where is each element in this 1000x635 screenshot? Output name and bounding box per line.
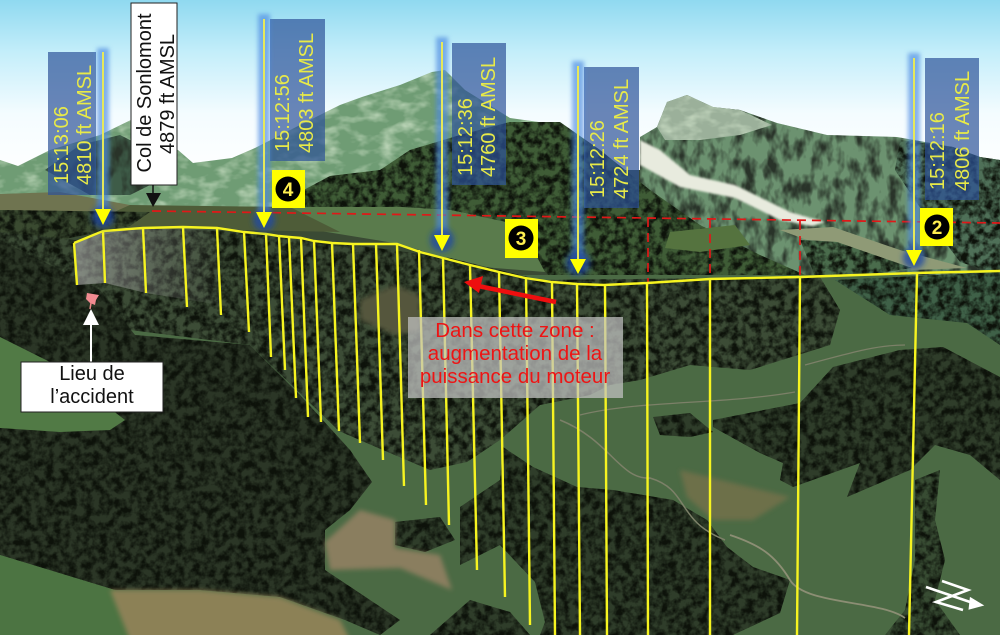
meadow: clearing in central hill <box>665 225 750 252</box>
callout: engine power increase: augmentation de la <box>428 342 603 365</box>
meadow: lower base <box>0 275 1000 635</box>
time label 15:13:06: 15:13:06 <box>51 106 73 184</box>
time label 15:12:16: 15:12:16 <box>927 112 949 190</box>
time label 15:12:56 <box>253 14 325 231</box>
forest: teal top right <box>835 272 1000 345</box>
red arrow to power increase zone <box>464 276 556 302</box>
sky <box>0 0 1000 175</box>
callout: engine power increase: Dans cette zone : <box>435 319 595 342</box>
track: lower right <box>730 535 905 618</box>
callout: engine power increase <box>408 317 623 398</box>
badge 4: 4 <box>283 180 294 201</box>
forest: bottom gap fill <box>430 600 530 635</box>
mountain: dark right massif <box>895 140 1000 275</box>
time label 15:13:06: 4810 ft AMSL <box>74 65 96 185</box>
field: tan bottom <box>110 590 350 635</box>
time label 15:12:26: 15:12:26 <box>587 120 609 198</box>
forest: right block <box>713 347 1000 497</box>
mountain: rock summit highlights <box>657 95 772 140</box>
forest: small clump right <box>653 413 713 437</box>
time label 15:12:36: 4760 ft AMSL <box>478 57 500 177</box>
time label 15:13:06 <box>48 48 114 228</box>
field: tan clearing <box>325 510 452 590</box>
callout: accident site with white arrow <box>21 309 163 412</box>
meadow: olive ridge left <box>0 192 152 215</box>
red dashed drop lines <box>648 218 800 283</box>
badge 3: 3 <box>516 229 526 250</box>
icon: red pushpin at accident site <box>86 293 99 309</box>
forest: small clump <box>395 517 455 552</box>
mountain: rocky crag and right massif <box>640 95 1000 275</box>
time label 15:12:16: 4806 ft AMSL <box>952 71 974 191</box>
time label 15:12:26: 4724 ft AMSL <box>611 79 633 199</box>
badge 3 <box>505 219 538 258</box>
vertical altitude lines <box>74 227 917 635</box>
terrain foreground <box>0 228 1000 635</box>
time label 15:12:26 <box>566 61 639 275</box>
badge 4 <box>272 170 305 208</box>
forest: ridge to lines slope <box>0 228 840 470</box>
terrain background: mountains <box>0 70 1000 287</box>
callout: engine power increase: puissance du moteur <box>420 365 610 388</box>
time label 15:12:56: 15:12:56 <box>272 74 294 152</box>
meadow: lower left light green <box>0 555 140 635</box>
time label 15:12:36: 15:12:36 <box>455 98 477 176</box>
forest: ridge left <box>0 210 150 240</box>
mountain: dark shadow left <box>45 135 150 195</box>
callout: Col de Sonlomont: Col de Sonlomont <box>134 13 156 172</box>
forest: lower centre <box>460 447 790 635</box>
field: brown patch in slope <box>360 285 420 335</box>
time label 15:12:56: 4803 ft AMSL <box>296 33 318 153</box>
badge 2: 2 <box>932 218 942 239</box>
mountain: left slopes and main peak <box>0 70 640 215</box>
callout: accident site with white arrow: l’accident <box>50 386 134 408</box>
callout: Col de Sonlomont: 4879 ft AMSL <box>157 34 179 154</box>
forest: right tree strip <box>885 470 960 635</box>
forest: lower left mass <box>0 240 400 635</box>
red dashed reference altitude <box>152 211 1000 283</box>
icon: north arrow <box>926 581 981 610</box>
badge 2 <box>920 208 953 246</box>
forest: right under massif <box>800 240 912 276</box>
track: upper <box>580 345 905 415</box>
meadow: olive strip <box>60 205 340 236</box>
callout: Col de Sonlomont <box>131 3 179 207</box>
forest: central hill <box>300 122 812 287</box>
terrain base <box>0 170 1000 635</box>
shaded segment near accident site <box>74 227 221 305</box>
time label 15:12:36 <box>430 37 506 252</box>
field: tan centre <box>680 470 790 520</box>
callout: accident site with white arrow: Lieu de <box>59 363 125 385</box>
flight path line <box>74 227 1000 285</box>
time label 15:12:16 <box>903 53 979 269</box>
flight path profile <box>74 227 1000 635</box>
scree: white band <box>640 140 825 226</box>
track: central <box>560 420 725 540</box>
meadow: pale valley floor <box>780 227 967 270</box>
meadow: left clearing <box>0 337 125 432</box>
meadow: grass below peak <box>290 207 545 272</box>
